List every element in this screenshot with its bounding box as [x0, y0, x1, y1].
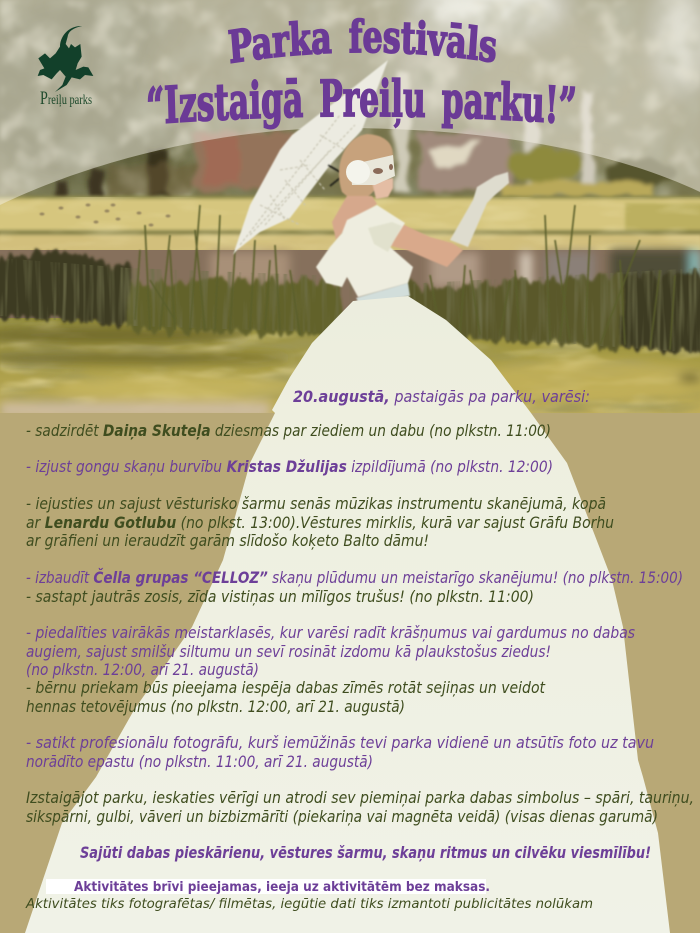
free entry notice: Aktivitātes brīvi pieejamas, ieeja uz aktivitātēm bez maksas.: [74, 879, 490, 895]
washed-out arc overlay across the top of the photo: [0, 0, 700, 205]
date heading: 20.augustā, pastaigās pa parku, varēsi:: [293, 387, 590, 406]
activity: Lenards Gotlubs: ar Lenardu Gotlubu (no plkst. 13:00).Vēstures mirklis, kurā var sajust Grāfu Borhu: [26, 513, 614, 532]
ducks on the bank: [40, 204, 170, 226]
trees behind: [0, 0, 700, 198]
arm: [388, 223, 463, 267]
activity: Daiņa Skuteļa: - sadzirdēt Daiņa Skuteļa dziesmas par ziediem un dabu (no plkstn. 11:00): [26, 421, 551, 440]
parasol: [233, 60, 388, 255]
logo wordmark: Preiļu parks: [40, 88, 92, 109]
activity: workshops: augiem, sajust smilšu siltumu un sevī rosināt izdomu kā plaukstošus ziedus!: [26, 642, 551, 661]
woman in white dress: [25, 134, 670, 933]
filming disclaimer: Aktivitātes tiks fotografētas/ filmētas, iegūtie dati tiks izmantoti publicitātes nolūkam: [25, 896, 593, 912]
reeds: [135, 205, 675, 350]
bank and pond: [0, 196, 700, 330]
activity: Kristas Džulijas: - izjust gongu skaņu burvību Kristas Džulijas izpildījumā (no plkstn. 12:00): [26, 457, 553, 476]
beige lower panel: [0, 413, 700, 933]
icon: maple leaf: [38, 26, 93, 92]
activity: face painting: - bērnu priekam būs pieejama iespēja dabas zīmēs rotāt sejiņas un veidot: [26, 678, 546, 697]
activity: animals: - sastapt jautrās zosis, zīda vistiņas un mīlīgos trušus! (no plkstn. 11:00): [26, 587, 534, 606]
logo: Preiļu parks: [38, 26, 93, 109]
nature symbols note: [26, 788, 694, 826]
title: Parka festivāls: Parka festivāls: [228, 18, 496, 64]
activity: photographer: [26, 733, 654, 771]
activity: photographer: norādīto epastu (no plkstn. 11:00, arī 21. augustā): [26, 752, 373, 771]
full skirt reaching to the page bottom: [25, 296, 670, 933]
lace mask with flower: [346, 155, 395, 185]
background photo: park and pond: [0, 0, 700, 418]
activity: Lenards Gotlubs: - iejusties un sajust vēsturisko šarmu senās mūzikas instrumentu skanējumā, kopā: [26, 494, 606, 513]
hair and head: [332, 134, 393, 240]
bodice and sash: [300, 205, 413, 385]
ruined brick building: [55, 70, 675, 198]
reed bed: [0, 250, 700, 355]
activity: face painting: [26, 678, 546, 716]
activity: workshops: [26, 623, 635, 679]
lace glove: [450, 172, 509, 247]
lawn: [0, 318, 700, 418]
title: Izstaigā Preiļu parku: “Izstaigā Preiļu parku!”: [148, 77, 576, 130]
activity: Lenards Gotlubs: ar grāfieni un ieraudzīt garām slīdošo koķeto Balto dāmu!: [26, 531, 429, 550]
activity: Lenards Gotlubs: [26, 494, 614, 550]
activity: face painting: hennas tetovējumus (no plkstn. 12:00, arī 21. augustā): [26, 697, 405, 716]
activity: workshops: (no plkstn. 12:00, arī 21. augustā): [26, 660, 259, 679]
